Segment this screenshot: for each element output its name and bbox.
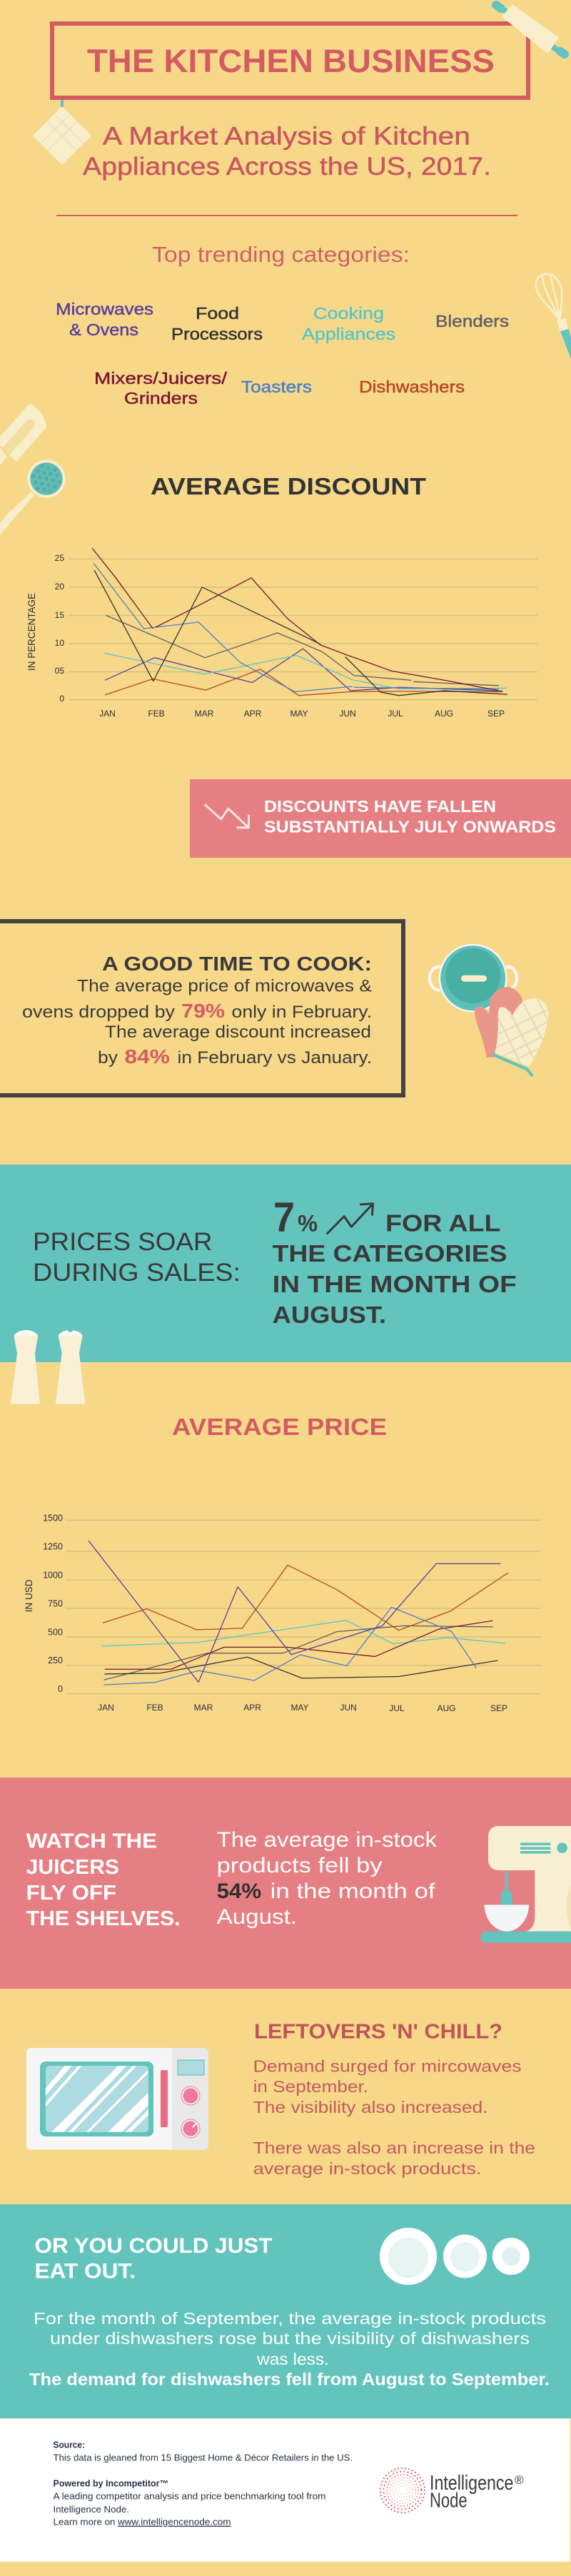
category: dishwashers: Dishwashers (359, 377, 465, 396)
line chart: average discount (26, 548, 537, 719)
source text: Source: (53, 2440, 85, 2450)
panel body text: in February vs January. (177, 1048, 372, 1068)
stat: 7 percent (273, 1195, 318, 1241)
category: mixers juicers grinders (94, 369, 228, 407)
panel: leftovers (26, 2020, 535, 2178)
prices soar label: DURING SALES: (33, 1259, 241, 1287)
oven mitt (475, 987, 549, 1075)
panel: a good time to cook (0, 921, 403, 1095)
y axis labels: 0 (59, 694, 64, 704)
x axis labels: JUL (388, 709, 403, 719)
y axis labels: 250 (48, 1655, 63, 1665)
heading: average price: AVERAGE PRICE (172, 1414, 387, 1440)
juicers body text (217, 1828, 438, 1929)
category: microwaves and ovens: & Ovens (69, 320, 138, 339)
x axis labels: AUG (437, 1703, 456, 1713)
x axis labels: FEB (148, 709, 165, 719)
title: THE KITCHEN BUSINESS (87, 43, 495, 79)
subtitle (83, 123, 491, 181)
logo: intelligence node: Node (430, 2490, 468, 2512)
prices soar label: PRICES SOAR (33, 1228, 213, 1256)
heading: average discount: AVERAGE DISCOUNT (151, 473, 426, 500)
x axis labels: MAR (194, 1703, 213, 1713)
heading: top trending categories: Top trending categories: (152, 242, 410, 267)
logo: intelligence node (380, 2468, 524, 2512)
category: mixers juicers grinders: Grinders (124, 389, 198, 407)
line chart: average price (23, 1513, 541, 1713)
x axis labels: AUG (435, 709, 453, 719)
icon: rising arrow (327, 1204, 373, 1234)
y axis title: IN USD (23, 1579, 34, 1612)
callout text: SUBSTANTIALLY JULY ONWARDS (264, 818, 556, 836)
eat out body text (34, 2309, 546, 2368)
eat out body text: under dishwashers rose but the visibility of dishwashers (50, 2329, 530, 2348)
juicers body text: August. (217, 1905, 297, 1929)
y axis title: IN PERCENTAGE (26, 593, 37, 671)
leftovers body text: Demand surged for mircowaves (253, 2057, 522, 2075)
x axis labels: APR (243, 1703, 261, 1713)
category: cooking appliances: Cooking (313, 304, 384, 323)
leftovers body text: The visibility also increased. (253, 2098, 488, 2116)
prices soar label (33, 1228, 241, 1287)
leftovers body text: There was also an increase in the (253, 2139, 535, 2157)
source text (53, 2440, 353, 2527)
y axis labels: 25 (55, 553, 64, 563)
juicers heading: THE SHELVES. (26, 1907, 181, 1930)
leftovers body text: average in-stock products. (253, 2159, 482, 2178)
y axis labels: 20 (55, 582, 64, 592)
x axis labels (99, 709, 505, 719)
category: microwaves and ovens: Microwaves (56, 300, 153, 318)
icon: whisk (536, 274, 571, 359)
category: toasters: Toasters (241, 377, 312, 396)
icon: stand mixer (480, 1826, 571, 1943)
y axis labels: 15 (55, 610, 64, 620)
y axis labels: 500 (48, 1627, 63, 1637)
callout: discounts have fallen (190, 779, 571, 858)
source text: Intelligence Node. (53, 2505, 129, 2515)
x axis labels: MAR (195, 709, 214, 719)
eat out body text: For the month of September, the average in-stock products (34, 2309, 546, 2328)
icon: salt and pepper shakers (11, 1330, 85, 1404)
category: cooking appliances (302, 304, 395, 343)
eat out heading: EAT OUT. (34, 2260, 136, 2283)
panel body text: ovens dropped by (22, 1003, 175, 1022)
callout text: DISCOUNTS HAVE FALLEN (264, 797, 496, 816)
juicers heading: JUICERS (26, 1856, 119, 1879)
icon: plates (380, 2228, 530, 2285)
panel body text: The average price of microwaves & (77, 976, 372, 996)
prices soar statement: AUGUST. (273, 1302, 386, 1328)
prices soar statement: FOR ALL (385, 1210, 501, 1237)
juicers heading (26, 1830, 181, 1930)
icon: pot and oven mitt (430, 944, 549, 1075)
x axis labels: SEP (490, 1703, 507, 1713)
source text: A leading competitor analysis and price benchmarking tool from (53, 2492, 325, 2502)
prices soar statement: THE CATEGORIES (273, 1240, 507, 1267)
panel body text: only in February. (231, 1003, 372, 1022)
category: cooking appliances: Appliances (302, 325, 395, 343)
category list (56, 300, 509, 407)
juicers heading: FLY OFF (26, 1882, 116, 1905)
juicers body text: The average in-stock (217, 1828, 438, 1852)
category: food processors (171, 304, 263, 343)
y axis labels: 1000 (43, 1570, 63, 1580)
y axis labels: 10 (55, 638, 64, 648)
y axis labels: 1250 (43, 1542, 63, 1552)
logo: intelligence node: ® (515, 2473, 524, 2487)
panel: juicers (0, 1778, 571, 1989)
juicers heading: WATCH THE (26, 1830, 157, 1852)
category: food processors: Food (196, 304, 239, 323)
data lines (89, 1541, 508, 1685)
y axis labels (43, 1513, 63, 1694)
juicers body text: products fell by (217, 1854, 383, 1877)
source text: This data is gleaned from 15 Biggest Home & Décor Retailers in the US. (53, 2453, 353, 2463)
icon: pot holder (34, 100, 90, 163)
panel body text: The average discount increased (105, 1023, 371, 1042)
subtitle: A Market Analysis of Kitchen (103, 123, 470, 150)
eat out heading: OR YOU COULD JUST (34, 2234, 273, 2258)
category: mixers juicers grinders: Mixers/Juicers/ (94, 369, 228, 387)
y axis labels (55, 553, 64, 704)
panel: prices soar (0, 1165, 571, 1362)
x axis labels: APR (244, 709, 262, 719)
eat out body text: was less. (256, 2350, 329, 2368)
source text: www.intelligencenode.com (117, 2517, 231, 2527)
x axis labels: JUN (340, 1703, 357, 1713)
y axis labels: 0 (58, 1684, 63, 1694)
logo: intelligence node: Intelligence (430, 2472, 513, 2495)
category: microwaves and ovens (56, 300, 153, 339)
eat out heading (34, 2234, 273, 2283)
panel body text (22, 976, 372, 1068)
pot (430, 944, 517, 1013)
callout text (264, 797, 556, 836)
panel body text: by (98, 1048, 118, 1068)
x axis labels: JUN (339, 709, 356, 719)
juicers body text: 54% (217, 1880, 261, 1903)
stat: 7 percent: 7 (273, 1195, 295, 1241)
prices soar statement (273, 1210, 517, 1328)
category: food processors: Processors (171, 325, 263, 343)
title box (52, 24, 528, 98)
icon: rolling pin (496, 5, 565, 54)
y axis labels: 1500 (43, 1513, 63, 1523)
icon: microwave (26, 2048, 208, 2150)
panel: source footer (0, 2419, 570, 2562)
panel body text: 84% (124, 1045, 170, 1068)
x axis labels: JAN (98, 1703, 114, 1713)
y axis labels: 750 (48, 1598, 63, 1608)
subtitle: Appliances Across the US, 2017. (83, 153, 491, 181)
icon: ladle (0, 460, 66, 535)
y axis labels: 05 (55, 666, 64, 676)
leftovers body text: in September. (253, 2077, 368, 2096)
source text: Learn more on (53, 2517, 116, 2527)
icon: falling arrow (205, 804, 248, 828)
prices soar statement: IN THE MONTH OF (273, 1271, 517, 1297)
x axis labels: SEP (487, 709, 505, 719)
icon: spatula (0, 403, 46, 465)
x axis labels (98, 1703, 507, 1713)
panel body text: 79% (181, 1000, 225, 1022)
juicers body text: in the month of (271, 1880, 435, 1903)
stat: 7 percent: % (298, 1211, 318, 1237)
category: blenders: Blenders (435, 312, 509, 330)
leftovers body text (253, 2057, 535, 2178)
x axis labels: FEB (146, 1703, 163, 1713)
leftovers heading: LEFTOVERS 'N' CHILL? (254, 2020, 502, 2043)
x axis labels: MAY (290, 1703, 309, 1713)
x axis labels: JUL (389, 1703, 405, 1713)
data lines (92, 548, 507, 696)
panel: eat out (0, 2204, 571, 2418)
x axis labels: JAN (99, 709, 116, 719)
eat out conclusion: The demand for dishwashers fell from August to September. (29, 2370, 550, 2390)
x axis labels: MAY (290, 709, 308, 719)
panel heading: A GOOD TIME TO COOK: (102, 953, 372, 975)
source text: Powered by Incompetitor™ (53, 2479, 168, 2489)
